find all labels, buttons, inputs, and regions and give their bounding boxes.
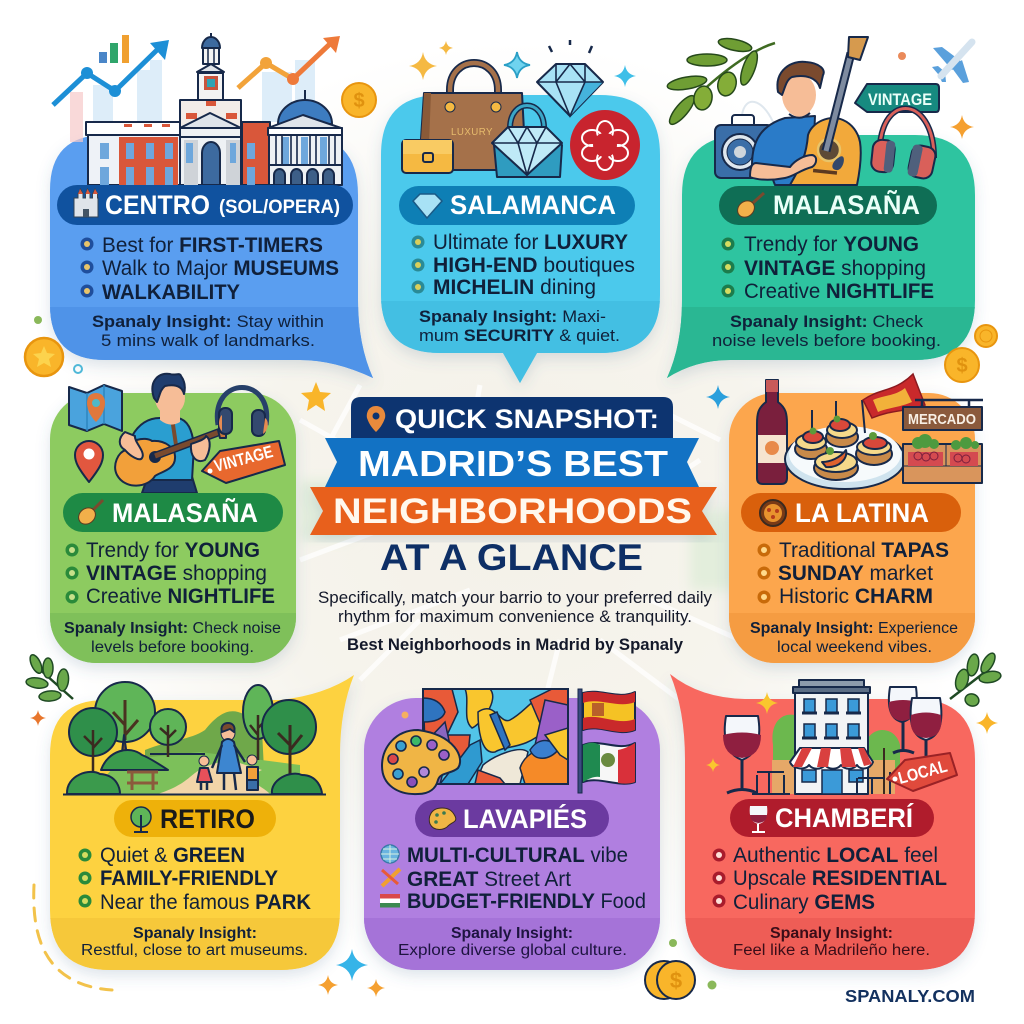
insight: Chamberí: Spanaly Insight: [770, 925, 893, 942]
card: Lavapiés [364, 698, 660, 970]
icon: star [301, 382, 331, 411]
header pill: Malasaña teal [719, 186, 937, 225]
icon: airplane [932, 42, 972, 83]
intro text [318, 588, 712, 626]
header pill: Chamberí [730, 799, 934, 837]
illustration: guitarist, map, pin, headphones, vintage tag [69, 374, 285, 493]
dots [34, 52, 906, 990]
illustration: musician with guitar, speaker, headphones, vintage tag: VINTAGE [868, 90, 932, 109]
insight band: Malasaña teal [667, 307, 975, 378]
list: Malasaña green: VINTAGE shopping [86, 562, 267, 585]
list: Malasaña teal [722, 233, 934, 303]
header pill: Centro: CENTRO [105, 190, 210, 220]
list: La Latina [758, 539, 949, 608]
wine glass left [723, 716, 761, 793]
website footer: SPANALY.COM [845, 986, 975, 1006]
ribbon: Madrid's Best [325, 438, 699, 487]
header pill: Lavapiés: LAVAPIÉS [463, 803, 587, 834]
header pill: Chamberí: CHAMBERÍ [775, 802, 914, 833]
insight: La Latina: Spanaly Insight: Experience [750, 620, 958, 637]
insight: La Latina: local weekend vibes. [777, 639, 932, 656]
header pill: Malasaña green: MALASAÑA [112, 497, 258, 528]
list: Salamanca [412, 231, 635, 299]
illustration: luxury bags, diamond, Michelin star [402, 40, 640, 180]
header pill: Salamanca: SALAMANCA [450, 190, 616, 220]
insight: Centro [92, 313, 324, 350]
list: Chamberí: Authentic LOCAL feel [733, 844, 938, 867]
illustration: wine, tapas plate, flag, mercado stall [757, 374, 983, 489]
tab: Quick Snapshot [351, 397, 673, 438]
speech bubble: Centro [50, 135, 373, 378]
illustration: paint palette [382, 730, 460, 794]
insight band: Malasaña green [50, 613, 296, 665]
illustration: Spain and Mexico flags [578, 689, 635, 793]
insight: Retiro: Spanaly Insight: [133, 925, 257, 942]
insight band: La Latina [729, 613, 975, 665]
list: Malasaña green [66, 539, 275, 608]
list: Lavapiés: BUDGET-FRIENDLY Food [407, 890, 646, 913]
heading: At a Glance: AT A GLANCE [380, 537, 643, 578]
icon: leaves left [25, 653, 73, 702]
panel: Centro [40, 33, 380, 387]
insight: La Latina [750, 620, 958, 656]
ribbon: Neighborhoods [310, 487, 717, 535]
illustration: musician with guitar, speaker, headphones, vintage tag [715, 37, 939, 185]
icon: coin top centre: $ [353, 90, 365, 112]
header pill: Centro: (SOL/OPERA) [219, 197, 340, 218]
speech bubble: Salamanca [381, 95, 660, 383]
intro text: rhythm for maximum convenience & tranquility. [338, 607, 692, 626]
list: La Latina: SUNDAY market [778, 562, 933, 585]
insight band: Salamanca [381, 301, 660, 383]
list: Centro: Best for FIRST-TIMERS [102, 234, 323, 257]
list: La Latina: Traditional TAPAS [779, 539, 949, 562]
illustration: neighbourhood cafe, wine glasses, local tag [706, 680, 957, 794]
list: Retiro: FAMILY-FRIENDLY [100, 867, 278, 890]
illustration: neighbourhood cafe, wine glasses, local tag: LOCAL [896, 757, 949, 788]
insight: Malasaña green: levels before booking. [91, 639, 254, 656]
insight: Salamanca: Spanaly Insight: Maxi- [419, 308, 606, 326]
icon: coin large right: $ [956, 355, 968, 377]
intro text: Specifically, match your barrio to your preferred daily [318, 588, 712, 607]
card: La Latina [729, 393, 975, 663]
list: Retiro: Near the famous PARK [100, 891, 311, 914]
icon: star coin left [25, 338, 63, 376]
icon: coin top centre [342, 83, 376, 117]
insight: Centro: Spanaly Insight: Stay within [92, 313, 324, 331]
illustration: guitarist, map, pin, headphones, vintage tag: VINTAGE [212, 442, 275, 476]
illustration: wine, tapas plate, flag, mercado stall: MERCADO [908, 411, 976, 428]
list: Malasaña teal: Creative NIGHTLIFE [744, 280, 934, 303]
wine glass front [911, 698, 941, 765]
ribbon: Neighborhoods: NEIGHBORHOODS [333, 492, 692, 531]
insight band: Chamberí [685, 918, 975, 970]
header pill: Salamanca [399, 186, 635, 225]
insight: Salamanca: mum SECURITY & quiet. [419, 327, 620, 345]
insight: Malasaña green [64, 620, 281, 656]
list: Salamanca: MICHELIN dining [433, 276, 596, 299]
list: Malasaña teal: Trendy for YOUNG [744, 233, 919, 256]
speech bubble: Malasaña teal [667, 135, 975, 378]
panel: Retiro [45, 675, 354, 973]
insight: Chamberí: Feel like a Madrileño here. [733, 942, 930, 959]
list: Salamanca: Ultimate for LUXURY [433, 231, 628, 254]
list: Malasaña green: Creative NIGHTLIFE [86, 585, 275, 608]
header pill: Retiro [114, 800, 276, 837]
speech bubble: Retiro [50, 675, 354, 970]
central title block [310, 397, 717, 654]
list: Lavapiés [380, 844, 646, 913]
illustration: rising charts and Real Casa de Correos building [53, 33, 342, 185]
insight band: Lavapiés [364, 918, 660, 973]
list: Lavapiés: GREAT Street Art [407, 868, 571, 891]
list: La Latina: Historic CHARM [779, 585, 933, 608]
list: Retiro [78, 844, 311, 914]
illustration: luxury bags, diamond, Michelin star: LUXURY [451, 126, 493, 138]
panel: La Latina [729, 374, 983, 665]
list: Centro [80, 234, 339, 304]
insight: Malasaña green: Spanaly Insight: Check noise [64, 620, 281, 637]
speech bubble: Chamberí [670, 674, 975, 970]
list: Chamberí: Upscale RESIDENTIAL [733, 867, 947, 890]
icon: coin small right [975, 325, 997, 347]
header pill: La Latina [741, 493, 961, 532]
insight: Lavapiés [398, 925, 627, 959]
panel: Malasaña (green) [50, 374, 296, 665]
header pill: Lavapiés [415, 800, 609, 837]
illustration: abstract street art painting [423, 689, 568, 784]
list: Centro: WALKABILITY [102, 281, 240, 304]
insight band: Retiro [45, 918, 345, 973]
list: Retiro: Quiet & GREEN [100, 844, 245, 867]
insight: Lavapiés: Spanaly Insight: [451, 925, 573, 942]
tab: Quick Snapshot: QUICK SNAPSHOT: [395, 404, 659, 434]
insight: Salamanca [419, 308, 620, 345]
insight: Lavapiés: Explore diverse global culture. [398, 942, 627, 959]
list: Chamberí: Culinary GEMS [733, 891, 875, 914]
list: Malasaña green: Trendy for YOUNG [86, 539, 260, 562]
insight band: Centro [50, 307, 373, 378]
panel: Lavapiés [364, 689, 660, 973]
list: Centro: Walk to Major MUSEUMS [102, 257, 339, 280]
panel: Chamberí [665, 674, 985, 973]
list: Lavapiés: MULTI-CULTURAL vibe [407, 844, 628, 867]
insight: Chamberí [733, 925, 930, 959]
card: Malasaña green [50, 393, 296, 663]
list: Salamanca: HIGH-END boutiques [433, 254, 635, 277]
dashed route [34, 885, 112, 990]
insight: Centro: 5 mins walk of landmarks. [101, 332, 315, 350]
icon: coin large right [945, 348, 979, 382]
icon: leaves right [950, 651, 1002, 708]
insight: Retiro: Restful, close to art museums. [81, 942, 308, 959]
insight: Malasaña teal: Spanaly Insight: Check [730, 313, 924, 331]
insight: Malasaña teal: noise levels before booking. [712, 332, 941, 350]
list: Chamberí [712, 844, 947, 914]
icon: coins bottom [645, 961, 695, 999]
header pill: Centro [57, 185, 353, 225]
header pill: La Latina: LA LATINA [795, 498, 929, 528]
header pill: Retiro: RETIRO [160, 804, 255, 834]
wine glass rear [889, 687, 917, 753]
byline: Best Neighborhoods in Madrid by Spanaly [347, 636, 684, 654]
panel: Salamanca [375, 40, 665, 391]
panel: Malasaña (teal) [660, 36, 980, 387]
header pill: Malasaña green [63, 493, 283, 532]
insight: Retiro [81, 925, 308, 959]
insight: Malasaña teal [712, 313, 941, 350]
ribbon: Madrid's Best: MADRID’S BEST [358, 443, 668, 484]
list: Malasaña teal: VINTAGE shopping [744, 257, 926, 280]
icon: coins bottom: $ [670, 968, 682, 993]
header pill: Malasaña teal: MALASAÑA [773, 189, 920, 220]
illustration: park with family [63, 682, 326, 794]
illustration: olive branch [666, 36, 775, 128]
